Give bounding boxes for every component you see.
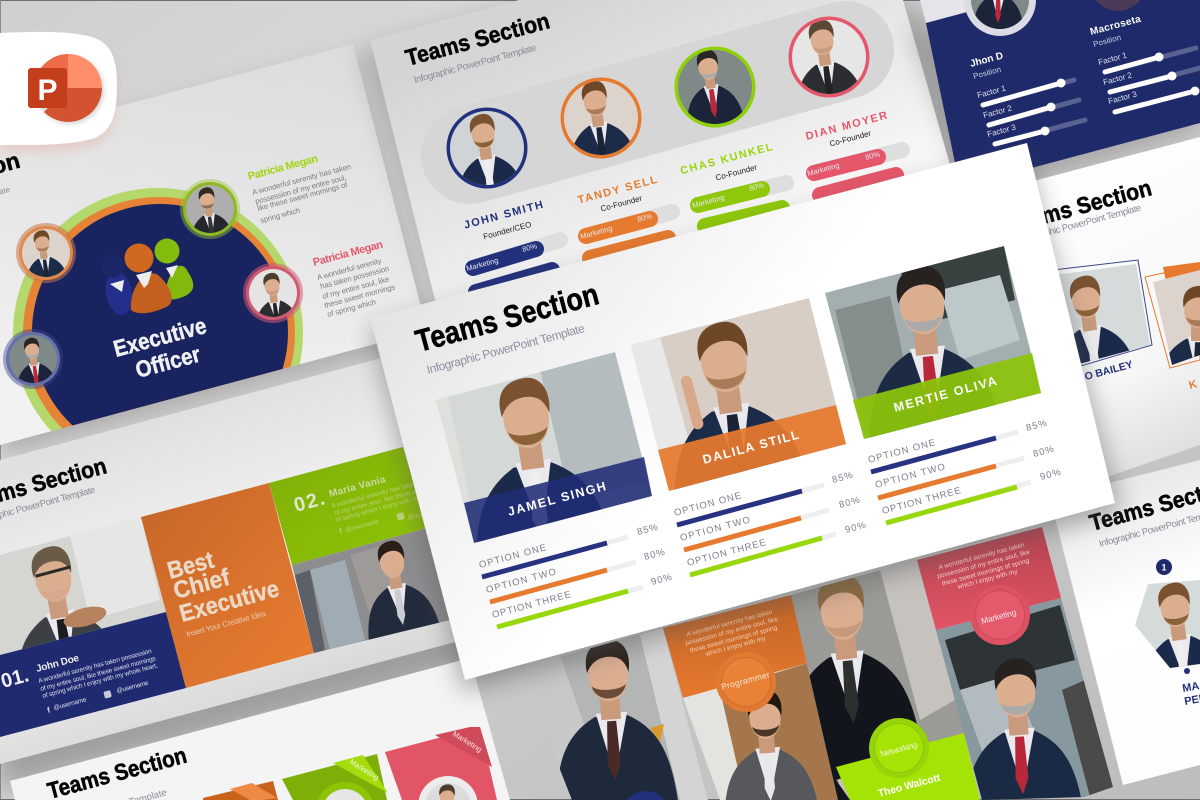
progress bars: mertie oliva: 90% bbox=[1039, 467, 1063, 483]
badge: programmer bbox=[716, 652, 776, 712]
slider labels: Factor 2 bbox=[1102, 71, 1133, 87]
bar labels: Marketing bbox=[806, 161, 840, 178]
card: green bbox=[282, 754, 388, 800]
name: john smith: Founder/CEO bbox=[482, 220, 532, 241]
avatar: tandy sell bbox=[560, 78, 642, 158]
badge: programmer: Programmer bbox=[720, 669, 771, 692]
text: macroseta: Position bbox=[1092, 33, 1122, 49]
text: jhon d: Position bbox=[972, 65, 1002, 81]
bar labels: 80% bbox=[521, 241, 538, 254]
panel: programmer: these sweet mornings of spring bbox=[689, 624, 778, 655]
photo card: mertie oliva bbox=[825, 246, 1041, 439]
progress bars: mertie oliva: OPTION THREE bbox=[881, 485, 962, 517]
panel: maria vania: of spring which I enjoy with my bbox=[335, 494, 422, 524]
panel: maria vania: Maria Vania bbox=[328, 474, 387, 500]
name: tandy sell: TANDY SELL bbox=[577, 174, 660, 207]
avatar: pink bbox=[243, 263, 303, 323]
avatar: navy bbox=[3, 329, 63, 389]
progress bars: dalila still bbox=[673, 470, 868, 575]
panel: programmer: A wonderful serenity has taken bbox=[686, 609, 774, 638]
photo card: jamel singh: JAMEL SINGH bbox=[506, 479, 607, 519]
progress bars: dalila still: 90% bbox=[844, 520, 868, 536]
icon: three executives bbox=[102, 238, 193, 317]
panel: programmer bbox=[663, 595, 808, 698]
panel: john doe: of my entire soul, like these sweet mornings bbox=[40, 655, 157, 693]
photo card: mertie oliva: MERTIE OLIVA bbox=[892, 374, 998, 415]
bar labels bbox=[465, 149, 881, 273]
progress bars: dalila still: OPTION THREE bbox=[686, 537, 767, 569]
text block: patricia megan pink: has taken possession bbox=[319, 264, 390, 291]
name fragment: K bbox=[1188, 378, 1199, 392]
photo frame: second bbox=[1144, 262, 1200, 369]
panel: best chief executive: Executive bbox=[177, 575, 282, 628]
name: chas kunkel: Co-Founder bbox=[715, 163, 758, 182]
icon: powerpoint badge: P bbox=[37, 74, 58, 107]
hexagon photo bbox=[1135, 580, 1200, 668]
panel: john doe: @username bbox=[116, 680, 150, 695]
panel: john doe: John Doe bbox=[35, 653, 81, 675]
photo card: dalila still bbox=[631, 298, 846, 491]
panel: john doe: of spring which I enjoy with my whole heart, bbox=[42, 662, 159, 700]
avatar backdrop pill bbox=[470, 50, 845, 155]
text block: patricia megan green: like these sweet mornings of bbox=[256, 180, 349, 213]
panel: best chief executive: Insert Your Creative Idea bbox=[185, 609, 267, 639]
panel: best chief executive bbox=[141, 483, 314, 688]
badge: networking: Networking bbox=[879, 739, 918, 759]
panel: marketing text: these sweet mornings of spring bbox=[941, 557, 1030, 588]
progress bars: jamel singh: 80% bbox=[643, 547, 667, 563]
panel: john doe: A wonderful serenity has taken possession bbox=[38, 648, 153, 685]
icon: powerpoint badge bbox=[0, 32, 117, 152]
panel: john doe bbox=[0, 612, 186, 737]
panel: marketing text bbox=[917, 527, 1061, 630]
panel: maria vania: of my entire soul, like these sweet bbox=[334, 485, 430, 517]
badge: networking bbox=[869, 718, 929, 778]
avatar: orange bbox=[16, 223, 76, 283]
subtitle: Infographic PowerPoint Template bbox=[413, 43, 537, 86]
slider knobs bbox=[1040, 52, 1200, 136]
slider labels: Factor 1 bbox=[1097, 51, 1128, 67]
text block: patricia megan pink: of my entire soul, like bbox=[321, 274, 390, 301]
heading: Teams Section bbox=[1005, 174, 1154, 238]
slider labels: Factor 2 bbox=[982, 104, 1013, 120]
text block: patricia megan pink: Patricia Megan bbox=[312, 239, 385, 269]
progress bars: jamel singh: OPTION TWO bbox=[485, 567, 557, 596]
panel: marketing text: possession of my entire soul, like bbox=[937, 549, 1031, 580]
panel: theo walcott: Theo Walcott bbox=[877, 772, 942, 800]
card: pink: Marketing bbox=[451, 729, 484, 754]
panel: marketing text: which I enjoy with my bbox=[956, 568, 1019, 591]
card: green: Marketing bbox=[348, 757, 381, 782]
progress bars: jamel singh: 90% bbox=[650, 572, 674, 588]
name fragment bbox=[1181, 668, 1200, 708]
panel: marketing text: A wonderful serenity has taken bbox=[938, 542, 1026, 571]
name: mario bailey: MARIO BAILEY bbox=[1058, 359, 1134, 390]
panel: maria vania: @username bbox=[407, 506, 443, 522]
skill bars bbox=[473, 150, 902, 292]
progress bars: mertie oliva: OPTION TWO bbox=[874, 462, 946, 491]
panel: maria vania: 02. bbox=[292, 488, 327, 517]
slider labels: Factor 3 bbox=[1107, 90, 1138, 106]
badge: marketing bbox=[970, 585, 1030, 645]
panel: programmer: possession of my entire soul, like bbox=[685, 616, 779, 647]
panel: john doe: @username bbox=[53, 696, 88, 712]
photo: seated man bbox=[526, 629, 708, 800]
avatar: john smith bbox=[446, 108, 528, 188]
progress bars: jamel singh: 85% bbox=[636, 522, 660, 538]
name: dian moyer: DIAN MOYER bbox=[804, 109, 890, 143]
panel: navy factor slide bbox=[910, 0, 1200, 200]
text: macroseta bbox=[1089, 14, 1142, 49]
panel: best chief executive: Chief bbox=[171, 564, 234, 605]
photo card: dalila still: DALILA STILL bbox=[701, 428, 801, 467]
photo: wood wall man bbox=[683, 663, 839, 800]
panel: bottom left team slide bbox=[10, 658, 510, 800]
panel: maria vania: A wonderful serenity has taken bbox=[331, 480, 418, 510]
text: macroseta: Macroseta bbox=[1089, 14, 1142, 38]
progress bars: mertie oliva bbox=[867, 418, 1063, 523]
panel: maria vania: @username bbox=[345, 518, 380, 534]
bar labels: Marketing bbox=[691, 193, 725, 210]
heading: Teams Section bbox=[412, 276, 602, 359]
progress bars: mertie oliva: OPTION ONE bbox=[867, 437, 936, 466]
progress bars: jamel singh: OPTION THREE bbox=[491, 589, 572, 621]
progress bars: dalila still: 80% bbox=[838, 495, 862, 511]
name: dian moyer: Co-Founder bbox=[829, 129, 872, 148]
text block: patricia megan pink: these sweet mornings bbox=[323, 282, 396, 310]
text block: patricia megan pink: A wonderful serenity bbox=[316, 256, 382, 282]
badge: marketing: Marketing bbox=[980, 607, 1018, 626]
progress bars: mertie oliva: 80% bbox=[1032, 444, 1056, 460]
progress bars: dalila still: OPTION TWO bbox=[679, 515, 751, 544]
photo: coat man bbox=[791, 560, 966, 800]
position fragment: P bbox=[1079, 385, 1087, 395]
panel: maria vania: f bbox=[338, 526, 343, 536]
panel: executive officer slide bbox=[0, 44, 435, 478]
panel: team profile slide bbox=[354, 0, 955, 302]
panel: main teams section slide bbox=[370, 143, 1122, 692]
bar labels: 80% bbox=[864, 149, 881, 162]
bar labels: 80% bbox=[748, 180, 765, 193]
name: tandy sell: Co-Founder bbox=[600, 194, 643, 213]
card: orange bbox=[203, 781, 278, 800]
text block: patricia megan pink bbox=[312, 239, 396, 319]
sliders bbox=[983, 48, 1200, 144]
avatar: dian moyer bbox=[788, 16, 870, 98]
subtitle: Infographic PowerPoint Template bbox=[425, 321, 587, 377]
panel: best chief executive: Best bbox=[165, 547, 217, 585]
panel: programmer: which I enjoy with my bbox=[704, 635, 767, 658]
slider labels: Factor 1 bbox=[976, 84, 1007, 100]
panel: maria vania bbox=[269, 447, 443, 565]
progress bars: mertie oliva: 85% bbox=[1025, 418, 1049, 434]
slider labels bbox=[976, 51, 1138, 139]
name fragment: MA bbox=[1181, 680, 1200, 695]
heading: Teams Section bbox=[403, 7, 552, 71]
avatar: green bbox=[180, 179, 240, 239]
progress bars: jamel singh bbox=[478, 522, 674, 627]
executive circle bbox=[13, 188, 303, 432]
photo: young man with phone bbox=[292, 528, 450, 653]
bar labels: Marketing bbox=[465, 256, 499, 273]
subtitle: Infographic PowerPoint Template bbox=[1018, 203, 1142, 246]
avatar: chas kunkel bbox=[674, 46, 756, 128]
photo card: jamel singh bbox=[436, 352, 652, 543]
text: jhon d: Jhon D bbox=[969, 51, 1005, 70]
number badge bbox=[1156, 559, 1172, 575]
panel: john doe: f bbox=[46, 705, 51, 715]
progress bars: dalila still: 85% bbox=[831, 470, 855, 486]
text block: patricia megan green: spring which bbox=[259, 206, 301, 225]
text block: patricia megan green bbox=[247, 153, 352, 225]
avatar: macroseta bbox=[1090, 0, 1146, 11]
panel: bottom photo strip slide bbox=[515, 527, 1120, 800]
photo: smiling man bbox=[0, 517, 166, 655]
slider labels: Factor 3 bbox=[986, 123, 1017, 139]
panel: numbered profile slide bbox=[1050, 460, 1200, 785]
text block: patricia megan green: Patricia Megan bbox=[247, 153, 320, 183]
text block: patricia megan green: possession of my entire soul, bbox=[254, 173, 347, 206]
number badge: 1 bbox=[1161, 562, 1167, 572]
name: john smith: JOHN SMITH bbox=[463, 199, 546, 232]
panel: best chief executive slide bbox=[0, 358, 460, 797]
bar labels: Marketing bbox=[579, 224, 613, 241]
progress bars: jamel singh: OPTION ONE bbox=[478, 542, 547, 571]
text block: patricia megan green: A wonderful serenity has taken bbox=[251, 162, 352, 197]
panel: executive officer slide: Officer bbox=[133, 341, 203, 383]
text block: patricia megan pink: of spring which bbox=[326, 297, 377, 319]
photo frame: mario bbox=[1058, 260, 1153, 366]
panel: theo walcott bbox=[836, 733, 980, 800]
panel: mario bailey slide bbox=[1036, 137, 1200, 476]
bar labels: 80% bbox=[636, 211, 653, 224]
photo: seated executive bbox=[930, 595, 1120, 800]
avatar: jhon d bbox=[966, 0, 1036, 36]
text: jhon d bbox=[969, 51, 1005, 81]
progress bars: dalila still: OPTION ONE bbox=[673, 490, 742, 519]
card: pink bbox=[385, 727, 497, 800]
heading: executive officer: Executive bbox=[111, 312, 209, 362]
name: chas kunkel: CHAS KUNKEL bbox=[679, 141, 775, 177]
